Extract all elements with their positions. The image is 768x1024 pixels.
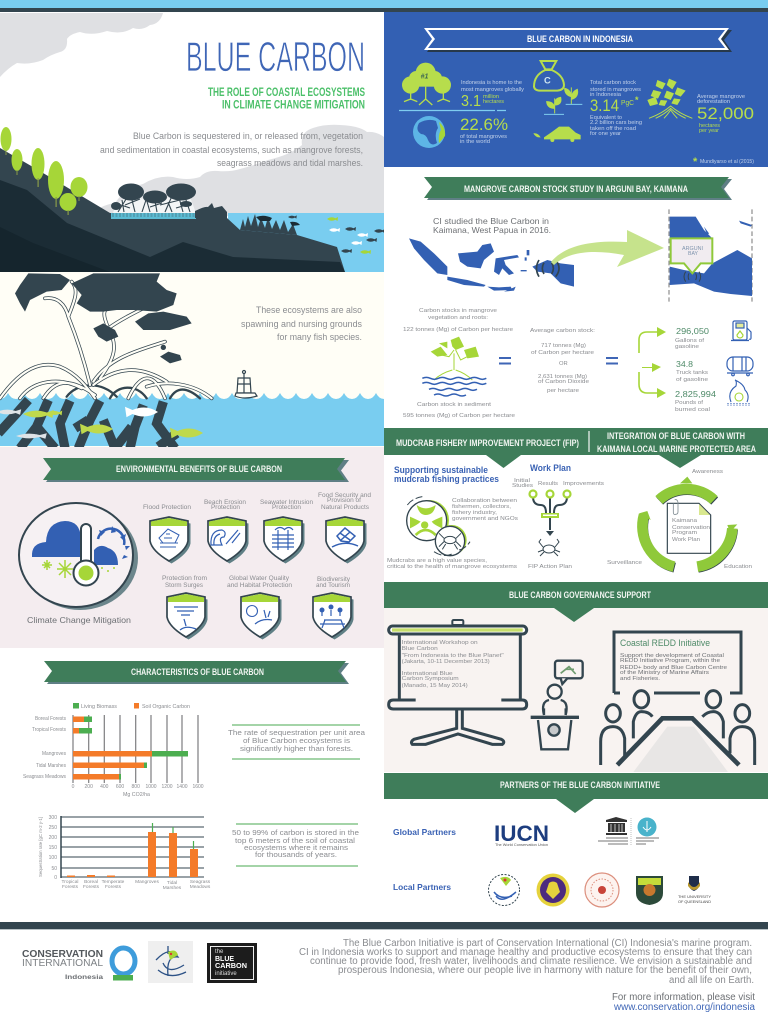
footer description: continue to provide food, fresh water, livelihoods and climate resilience. We envision a sustainable and (310, 956, 752, 967)
icon: projector screen (389, 620, 527, 744)
heading: supporting sustainable: mudcrab fishing practices (394, 474, 499, 484)
chart: sequestration rate bars: 100 (49, 855, 57, 861)
stat: burned coal: burned coal (675, 407, 710, 413)
coastal redd text box: Support the development of Coastal (620, 653, 724, 659)
benefit: food security: Provision of (327, 498, 361, 504)
work plan: Work Plan (530, 463, 571, 473)
chart: carbon stocks bar chart: 600 (116, 784, 124, 790)
logo: local partner two (536, 874, 570, 906)
divider line: blue stats (399, 110, 506, 112)
label: global partners: Global Partners (393, 827, 456, 837)
study intro text (433, 216, 551, 235)
arrow: zoom to arguni bay (551, 230, 664, 267)
mangrove tree (0, 273, 212, 398)
spawning text: for many fish species. (277, 332, 362, 342)
chart: sequestration rate bars: Boreal (84, 879, 98, 885)
stat: 52,000 hectares: per year (699, 128, 719, 134)
logo: iucn: The World Conservation Union (495, 843, 548, 847)
panel: blue carbon intro (0, 12, 385, 272)
chart: carbon stocks bar chart: 0 (72, 784, 75, 790)
stat: 3.14 PgC: Total carbon stock (590, 80, 636, 86)
chart: sequestration rate bars: Meadows (190, 884, 211, 890)
workshop text: International Workshop on (402, 640, 478, 646)
chart: sequestration rate bars: 0 (54, 875, 57, 881)
chart: sequestration rate bars: Tidal (167, 880, 177, 886)
heading: partners (384, 773, 768, 813)
logo: university of queensland (678, 876, 711, 904)
collaboration text: government and NGOs (452, 516, 518, 522)
icon: meeting table and people (601, 691, 755, 773)
workshop text: "From Indonesia to the Blue Planet" (402, 653, 504, 659)
mudcrab text: Mudcrabs are a high value species, (387, 558, 487, 564)
collaboration text: Collaboration between (452, 498, 517, 504)
footer description: CI in Indonesia works to support and manage healthy and productive ecosystems to ensure that they can (299, 947, 752, 958)
coastal redd text box: and Fisheries. (620, 676, 660, 682)
intro text: and sedimentation in coastal ecosystems, such as mangrove forests, (100, 145, 363, 155)
cycle diagram: Work Plan (672, 537, 700, 543)
benefit: beach erosion: Protection (211, 505, 240, 511)
benefit: storm surges: Storm Surges (165, 583, 203, 589)
subtitle: THE ROLE OF COASTAL ECOSYSTEMS (208, 87, 365, 99)
icon: mangrove number one (402, 63, 451, 105)
coastal redd text box: REDD+ body and Blue Carbon Centre (620, 665, 727, 671)
average carbon stock text: 717 tonnes (Mg) (541, 343, 586, 349)
logo: conservation international: INTERNATIONAL (22, 957, 103, 969)
cycle diagram (607, 469, 752, 570)
carbon stocks in vegetation text: Carbon stocks in mangrove (419, 308, 497, 314)
stat: gallons of gasoline: gasoline (675, 344, 699, 350)
stat: 3.14 PgC: taken off the road (590, 126, 636, 132)
stat: 3.14 PgC: 2.2 billion cars being (590, 120, 642, 126)
benefit: flood protection: Flood Protection (143, 505, 191, 511)
work plan: Studies (512, 483, 533, 489)
average carbon stock text: of Carbon per hectare (531, 350, 594, 356)
benefit: beach erosion (204, 500, 248, 564)
heading: arguni bay study: MANGROVE CARBON STOCK STUDY IN ARGUNI BAY, KAIMANA (464, 184, 688, 195)
stat: 22.6 percent: 22.6% (460, 115, 508, 134)
stat: 3.14 PgC: in Indonesia (590, 92, 622, 98)
chart: sequestration rate bars: 250 (49, 825, 57, 831)
logo: blue carbon initiative: initiative (215, 971, 237, 977)
stat: burned coal: Pounds of (675, 400, 704, 406)
cycle diagram: Kaimana (672, 518, 698, 524)
stat: truck tanks: of gasoline (676, 377, 708, 383)
chart: carbon stocks bar chart: 1200 (161, 784, 173, 790)
stat: 3.14 PgC: for one year (590, 131, 621, 137)
chart: sequestration rate bars: Marshes (163, 885, 182, 891)
stat: 52,000 hectares (697, 94, 754, 134)
work plan: FIP Action Plan (528, 564, 572, 570)
contact link: www.conservation.org/indonesia (613, 1002, 755, 1013)
stat: burned coal: 2,825,994 (675, 389, 716, 399)
callout: carbon storage (232, 824, 359, 866)
stat: 3.1 million hectares: hectares (483, 99, 505, 105)
average carbon stock text: Average carbon stock: (530, 328, 595, 334)
benefit: water quality: Global Water Quality (229, 576, 289, 582)
icon: crab (538, 539, 560, 556)
logo: university of queensland: OF QUEENSLAND (678, 900, 711, 904)
panel: environmental benefits (0, 447, 384, 648)
coastal redd text box: of the Ministry of Marine Affairs (620, 670, 709, 676)
logo: local partner three (585, 873, 619, 907)
chart: carbon stocks bar chart: 400 (100, 784, 109, 790)
chart: carbon stocks bar chart: Mg CO2/ha (123, 792, 151, 798)
collaboration text (452, 498, 518, 522)
stat: truck tanks: 34.8 (676, 359, 693, 369)
icon: globe (413, 116, 445, 148)
stat: 3.14 PgC: stored in mangroves (590, 87, 641, 93)
cloud: top left (0, 13, 163, 77)
callout: sequestration rate (228, 725, 365, 759)
stat: gallons of gasoline (675, 326, 709, 350)
footer description: and all life on Earth. (669, 975, 754, 986)
panel: mudcrab and marine protected area (384, 428, 768, 582)
workshop text: International Blue (402, 671, 453, 677)
stat: 52,000 hectares: 52,000 (697, 104, 754, 123)
benefit: water quality: and Habitat Protection (227, 583, 292, 589)
average carbon stock text (530, 328, 595, 394)
cycle diagram: Conservation (672, 525, 710, 531)
stat: 22.6 percent: of total mangroves (460, 134, 507, 140)
callout: carbon storage: 50 to 99% of carbon is stored in the (232, 828, 359, 837)
callout: sequestration rate: significantly higher than forests. (240, 744, 353, 753)
benefit: seawater intrusion: Seawater Intrusion (260, 500, 313, 506)
chart: carbon stocks bar chart: Boreal Forests (35, 716, 66, 722)
stat: 3.14 PgC: Equivalent to (590, 115, 622, 121)
panel: spawning grounds (0, 272, 384, 448)
cycle diagram: Education (724, 564, 752, 570)
icon: equals sign left (499, 358, 511, 364)
icon: mangrove number one: #1 (421, 73, 429, 80)
coastal redd text box: Coastal REDD Initiative (620, 638, 710, 648)
benefit: biodiversity: Biodiversity (317, 577, 350, 583)
collaboration text: fishery industry, (452, 510, 497, 516)
benefit: food security (318, 493, 371, 564)
stat: 52,000 hectares: deforestation (697, 99, 730, 105)
underwater roots (0, 400, 177, 448)
logo: unesco ioc (598, 817, 659, 846)
chart: sequestration rate bars: Sequestration rate [gC m-2 y-1] (38, 817, 44, 877)
chart: sequestration rate bars: 50 (51, 866, 57, 872)
work plan: Initial (514, 478, 530, 484)
chart: sequestration rate bars: Forests (83, 884, 100, 890)
heading: mudcrab fip: MUDCRAB FISHERY IMPROVEMENT PROJECT (FIP) (396, 438, 579, 449)
cycle diagram: Program (672, 530, 697, 536)
icon: carbon bag plants and car: C (544, 75, 551, 85)
stat: burned coal (675, 389, 716, 413)
carbon stocks in vegetation text (403, 308, 513, 333)
carbon stock in sediment text (403, 402, 515, 419)
logo: iucn: IUCN (494, 821, 549, 846)
heading: arguni bay study (424, 177, 732, 200)
carbon stock in sediment text: 595 tonnes (Mg) of Carbon per hectare (403, 413, 515, 419)
heading: blue carbon in indonesia: BLUE CARBON IN INDONESIA (527, 34, 633, 45)
heading: characteristics: CHARACTERISTICS OF BLUE CARBON (131, 667, 264, 678)
logo: kkp partner (148, 941, 193, 983)
benefit: storm surges (162, 576, 208, 640)
chart legend: Soil Organic Carbon (142, 704, 190, 710)
chart: sequestration rate bars: 200 (49, 835, 57, 841)
stat: 3.14 PgC: PgC (621, 100, 634, 107)
spawning text: These ecosystems are also (256, 305, 362, 315)
stat: 3.1 million hectares: 3.1 (461, 93, 481, 110)
logo: conservation international: CONSERVATION (22, 948, 103, 960)
heading: governance: BLUE CARBON GOVERNANCE SUPPORT (509, 590, 651, 601)
heading: supporting sustainable: Supporting sustainable (394, 465, 488, 475)
heading: integration with marine protected area (589, 428, 768, 468)
average carbon stock text: OR (559, 361, 568, 367)
footer description (299, 938, 754, 986)
chart: sequestration rate bars: 300 (49, 815, 57, 821)
chart: sequestration rate bars: Seagrass (190, 879, 211, 885)
chart legend (73, 703, 190, 710)
stat: truck tanks: Truck tanks (676, 370, 708, 376)
climate change mitigation icon (19, 503, 138, 610)
subtitle: IN CLIMATE CHANGE MITIGATION (222, 100, 365, 112)
fish (0, 407, 203, 439)
callout: carbon storage: for thousands of years. (255, 850, 337, 859)
chart: carbon stocks bar chart: Tidal Marshes (36, 763, 66, 769)
study intro text: Kaimana, West Papua in 2016. (433, 225, 551, 235)
benefit: food security: Natural Products (321, 505, 369, 511)
spawning text (241, 305, 363, 342)
stat: 3.1 million hectares: most mangroves globally (461, 87, 524, 93)
cycle diagram: Awareness (692, 469, 723, 475)
label: arguni bay (682, 246, 703, 257)
chart: carbon stocks bar chart: 1600 (192, 784, 204, 790)
document icon (667, 500, 711, 553)
heading: partners: PARTNERS OF THE BLUE CARBON INITIATIVE (500, 780, 660, 791)
buoy (235, 370, 257, 398)
label: arguni bay: BAY (688, 251, 699, 257)
label: local partners: Local Partners (393, 882, 451, 892)
contact link: For more information, please visit (612, 992, 755, 1003)
benefit: food security: Food Security and (318, 493, 371, 499)
logo: university of queensland: THE UNIVERSITY (678, 895, 711, 899)
chart: sequestration rate bars: Forests (62, 884, 79, 890)
mangrove forest (111, 184, 227, 219)
stat: 3.14 PgC (590, 80, 642, 137)
chart: carbon stocks bar chart (23, 703, 204, 798)
cycle diagram: Surveillance (607, 560, 642, 566)
chart: carbon stocks bar chart: 1000 (145, 784, 157, 790)
panel: partners (384, 772, 768, 920)
stat: 3.14 PgC: * (635, 95, 639, 105)
chart: sequestration rate bars: Forests (105, 884, 122, 890)
heading: environmental benefits: ENVIRONMENTAL BENEFITS OF BLUE CARBON (116, 464, 282, 475)
collaboration text: fishermen, collectors, (452, 504, 511, 510)
chart legend: Living Biomass (81, 704, 118, 710)
icon: mangrove and sediment waves (422, 337, 486, 396)
logo: conservation international: Indonesia (65, 974, 103, 981)
carbon stocks in vegetation text: 122 tonnes (Mg) of Carbon per hectare (403, 327, 513, 333)
subtitle (208, 87, 365, 112)
stat: 3.1 million hectares: Indonesia is home to the (461, 80, 522, 86)
carbon stocks in vegetation text: vegetation and roots: (428, 315, 488, 321)
stat: 52,000 hectares: hectares (699, 123, 721, 129)
logo: blue carbon initiative (207, 943, 257, 983)
carbon stock in sediment text: Carbon stock in sediment (417, 402, 491, 408)
icon: deforested mangrove (647, 79, 692, 118)
icon: equals sign right (606, 358, 618, 364)
benefit: seawater intrusion: Protection (272, 505, 301, 511)
logo: local partner one (488, 874, 520, 906)
footer (0, 920, 768, 1024)
stat: gallons of gasoline: Gallons of (675, 338, 705, 344)
heading: characteristics (44, 661, 349, 684)
label: climate change mitigation: Climate Change Mitigation (27, 615, 131, 625)
panel: blue carbon governance support (384, 582, 768, 773)
benefit: flood protection (143, 505, 191, 564)
chart: sequestration rate bars: Mangroves (135, 879, 159, 885)
panel: arguni bay study (384, 167, 768, 428)
arrows: three equivalents (639, 327, 666, 398)
logo: local partner four (636, 876, 663, 905)
chart: sequestration rate bars: 150 (49, 845, 57, 851)
heading: governance (384, 582, 768, 622)
workshop text: Carbon Symposium (402, 676, 459, 682)
benefit: water quality (227, 576, 292, 640)
flow diagram (530, 490, 570, 536)
stat: 52,000 hectares: Average mangrove (697, 94, 745, 100)
benefit: storm surges: Protection from (162, 576, 207, 582)
footer description: The Blue Carbon Initiative is part of Conservation International (CI) Indonesia's marine program. (343, 938, 752, 949)
logo: blue carbon initiative: CARBON (215, 963, 247, 970)
stat: gallons of gasoline: 296,050 (676, 326, 709, 336)
mudcrab text: critical to the health of mangrove ecosystems (387, 564, 517, 570)
water and waves (0, 393, 384, 446)
stat: 3.14 PgC: 3.14 (590, 96, 619, 115)
chart: carbon stocks bar chart: 200 (85, 784, 93, 790)
footer description: prosperous Indonesia, where our people live in harmony with nature for the benefit of their own, (338, 965, 752, 976)
heading: blue carbon in indonesia (424, 28, 732, 52)
icon: tank truck (727, 357, 753, 376)
chart: sequestration rate bars: Tropical (62, 879, 78, 885)
top banner strip (0, 0, 768, 12)
seagrass and marine life (240, 214, 385, 254)
mudcrab text (387, 558, 517, 570)
intro text: seagrass meadows and tidal marshes. (217, 158, 363, 168)
benefit: biodiversity (313, 577, 354, 640)
chart: carbon stocks bar chart: 800 (132, 784, 140, 790)
logo: conservation international (22, 948, 135, 981)
workshop text (402, 640, 504, 689)
stat: 22.6 percent: in the world (460, 139, 490, 145)
citation: * (693, 156, 698, 168)
benefit: seawater intrusion (260, 500, 313, 564)
water (228, 213, 384, 272)
benefit: beach erosion: Beach Erosion (204, 500, 246, 506)
stat: 3.1 million hectares: million (483, 94, 499, 100)
coastal redd text box (614, 632, 741, 693)
panel: blue carbon in indonesia (384, 12, 768, 168)
work plan: Results (538, 481, 558, 487)
chart: carbon stocks bar chart: Seagrass Meadows (23, 774, 66, 780)
chart: sequestration rate bars: Temperate (102, 879, 125, 885)
study intro text: CI studied the Blue Carbon in (433, 216, 549, 226)
contact link (612, 992, 755, 1013)
workshop text: Blue Carbon (402, 646, 438, 652)
stat: 22.6 percent (460, 115, 508, 145)
intro text: Blue Carbon is sequestered in, or released from, vegetation (133, 131, 363, 141)
icon: carbon bag plants and car (533, 61, 582, 142)
icon: speaker at podium (531, 661, 583, 749)
average carbon stock text: of Carbon Dioxide (538, 379, 589, 385)
chart: carbon stocks bar chart: Tropical Forests (32, 727, 66, 733)
stat: 3.1 million hectares (461, 80, 524, 110)
icon: collaboration and crab (407, 497, 470, 556)
workshop text: (Manado, 15 May 2014) (402, 683, 468, 689)
coastal redd text box: REDD Initiative Program, within the (620, 658, 720, 664)
icon: burning co2 (728, 380, 749, 406)
logo: blue carbon initiative: BLUE (215, 956, 234, 963)
chart: carbon stocks bar chart: Mangroves (42, 751, 66, 757)
chart: carbon stocks bar chart: 1400 (176, 784, 188, 790)
heading: supporting sustainable (394, 465, 499, 484)
spawning text: spawning and nursing grounds (241, 319, 363, 329)
callout: carbon storage: top 6 meters of the soil of coastal (235, 836, 355, 845)
cloud: behind text (90, 125, 384, 216)
logo: blue carbon initiative: the (215, 949, 224, 955)
callout: sequestration rate: of Blue Carbon ecosystems is (243, 736, 350, 745)
label: arguni bay: ARGUNI (682, 246, 703, 252)
chart: sequestration rate bars (38, 815, 211, 891)
stat: truck tanks (676, 359, 708, 383)
workshop text: (Jakarta, 10-11 December 2013) (402, 659, 490, 665)
average carbon stock text: 2,631 tonnes (Mg) (538, 374, 587, 380)
icon: gas pump (731, 321, 751, 340)
heading: mudcrab fip (384, 428, 589, 468)
map: arguni bay inset (669, 209, 752, 302)
title: BLUE CARBON (186, 33, 365, 80)
work plan: Improvements (563, 481, 604, 487)
benefit: biodiversity: and Tourism (316, 583, 350, 589)
intro text (100, 131, 363, 168)
panel: characteristics (0, 648, 384, 920)
map: indonesia (409, 238, 574, 292)
callout: carbon storage: ecosystems where it remains (244, 843, 348, 852)
citation: Mundiyarso et al (2015) (700, 159, 754, 165)
heading: environmental benefits (43, 458, 349, 482)
work plan (512, 463, 604, 570)
callout: sequestration rate: The rate of sequestration per unit area (228, 728, 365, 737)
hill (0, 148, 345, 272)
trees (0, 127, 88, 215)
average carbon stock text: per hectare (547, 388, 579, 394)
citation (693, 156, 754, 168)
